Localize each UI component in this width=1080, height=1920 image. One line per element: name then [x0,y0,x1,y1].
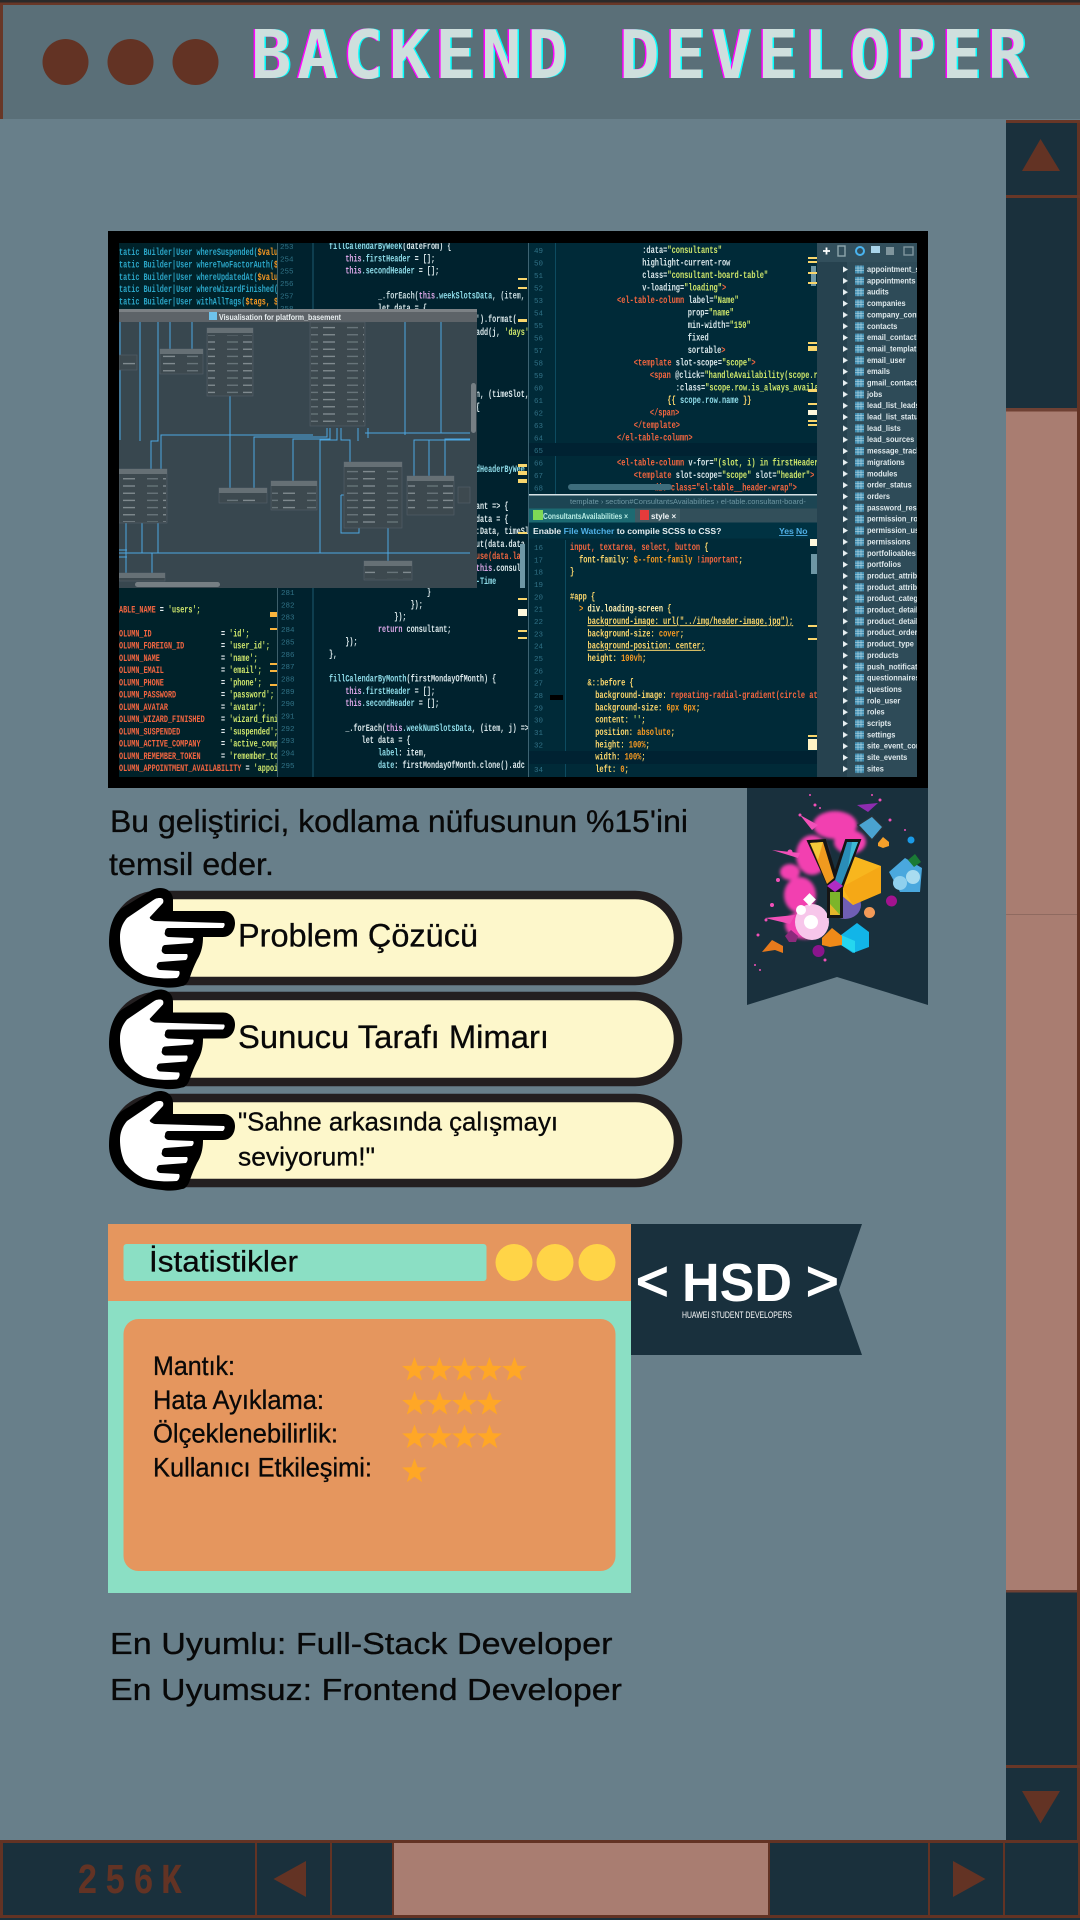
code panel: left PHP: = [221,665,225,677]
database table sidebar: product_detail [867,605,918,615]
arrow: scroll left [274,1861,306,1897]
relation lines [119,322,470,573]
database table sidebar: appointment_s [867,264,920,274]
database table sidebar: permissions [867,537,911,547]
code panel: middle JS: ut(data.data [476,539,525,551]
code panel: left PHP: = [245,763,250,775]
database table sidebar: emails [867,367,891,376]
database table sidebar: permission_us [867,525,920,535]
database table sidebar: role_user [867,696,900,705]
code panel: right Vue and SCSS: 25 [534,656,544,664]
code panel: right Vue and SCSS: <el-table-column v-for="(slot, i) in firstHeader" [617,457,823,469]
code panel: left PHP: 'name'; [229,653,258,665]
code panel: left PHP: ABLE_NAME = 'users'; [119,604,201,616]
code panel: middle JS: 285 [281,639,295,647]
horizontal status bar [0,1840,1080,1920]
code panel: right Vue and SCSS: class="consultant-board-table" [642,270,768,281]
code panel: middle JS: }, [329,649,337,660]
code panel: left PHP: = [221,628,225,640]
code panel: right Vue and SCSS: <div class="el-table__header-wrap"> [650,482,797,494]
database table sidebar: jobs [866,389,883,399]
code panel: middle JS: 295 [281,763,295,771]
database table sidebar: product_type [867,639,914,649]
code panel: left PHP: OLUMN_FOREIGN_ID [119,641,184,652]
database table sidebar: site_events [867,752,908,762]
list item: Sunucu Tarafı Mimarı [109,990,678,1089]
database table sidebar: email_contact [867,333,917,342]
code panel: middle JS: :Data, timeSl [476,526,529,538]
code panel: right Vue and SCSS: fixed [688,332,709,344]
code panel: right Vue and SCSS: height: 100%; [595,739,650,751]
code panel: right Vue and SCSS: 61 [534,398,544,406]
code panel: right Vue and SCSS: </template> [634,420,680,431]
code panel: middle JS: this.secondHeader = []; [345,266,439,277]
code panel: right Vue and SCSS: } [570,567,574,578]
code panel: right Vue and SCSS: 23 [534,631,544,639]
code panel: right Vue and SCSS: highlight-current-row [642,257,731,269]
list item: quote [109,1091,678,1191]
code panel: right Vue and SCSS: 54 [534,310,544,318]
heading: İstatistikler: İstatistikler [149,1246,298,1279]
compatibility text: En Uyumsuz: Frontend Developer [110,1672,622,1707]
code panel: middle JS: 287 [281,664,295,672]
code panel: left PHP: tatic Builder|User withAllTags($tags, $ [119,296,278,308]
editor split: breadcrumb and tabs: Enable File Watcher to compile SCSS to CSS? [533,526,721,536]
code panel: right Vue and SCSS: <template slot-scope="scope"> [634,357,756,369]
code panel: right Vue and SCSS: 49 [534,248,543,256]
code panel: right Vue and SCSS: :class="scope.row.is_always_available" [676,382,835,394]
window title bar [0,0,1080,119]
code panel: middle JS: -Time [476,576,496,588]
database table sidebar: portfolioables [867,548,916,558]
code panel: right Vue and SCSS: 52 [534,286,543,294]
code panel: left PHP: OLUMN_NAME [119,653,160,665]
code panel: left PHP: = [221,677,225,689]
database table sidebar: settings [867,730,896,740]
intro text: Bu geliştirici, kodlama nüfusunun %15'ini [110,803,688,839]
code panel: middle JS: }); [394,612,407,623]
code panel: middle JS: 258 [280,306,294,314]
code panel: left PHP: 'user_id'; [229,641,270,652]
code panel: middle JS: fillCalendarByWeek(dateFrom) { [329,241,451,253]
code panel: middle JS: 288 [281,676,295,684]
database table sidebar: permission_rol [867,514,920,524]
code panel: right Vue and SCSS: </el-table-column> [617,432,693,444]
database table sidebar: companies [867,298,906,308]
code panel: right Vue and SCSS: background-image: url("../img/header-image.jpg"); [587,616,793,627]
database table sidebar: roles [867,707,885,717]
code panel: middle JS: fillCalendarByMonth(firstMondayOfMonth) { [329,673,496,685]
list item: Sunucu Tarafı Mimarı: Sunucu Tarafı Mimarı [238,1019,549,1055]
paint splash [780,811,866,939]
code panel: right Vue and SCSS: 17 [534,557,543,565]
database table sidebar: appointments [867,276,916,285]
code panel: middle JS: this.secondHeader = []; [345,698,439,710]
code panel: right Vue and SCSS: </span> [650,407,679,419]
code panel: right Vue and SCSS: content: ''; [595,715,646,726]
database table sidebar: sites [867,764,884,774]
code panel: right Vue and SCSS: 32 [534,742,543,750]
code panel: left PHP: = [221,653,225,665]
code panel: left PHP: = [221,751,225,762]
database visualisation window [119,309,477,588]
code panel: right Vue and SCSS: height: 100vh; [587,653,646,664]
vertical scrollbar [1006,120,1080,1840]
code panel: right Vue and SCSS: :data="consultants" [642,245,722,256]
code panel: right Vue and SCSS: 27 [534,681,543,689]
code panel: right Vue and SCSS: background-size: 6px 6px; [595,702,700,714]
code panel: right Vue and SCSS: position: absolute; [595,727,675,738]
code panel: middle JS: 286 [281,652,295,660]
code panel: right Vue and SCSS: sortable> [688,345,726,356]
database table sidebar: order_status [867,480,912,490]
code panel: right Vue and SCSS: 64 [534,436,544,444]
code panel: right Vue and SCSS: width: 100%; [595,752,646,763]
code panel: right Vue and SCSS: input, textarea, select, button { [570,542,709,553]
code panel: right Vue and SCSS [529,243,835,777]
code panel: left PHP [119,248,277,773]
code panel: right Vue and SCSS: 55 [534,323,544,331]
database table sidebar: product_attrib [867,571,917,581]
editor split: breadcrumb and tabs [529,494,817,538]
editor split: breadcrumb and tabs: style × [651,512,676,521]
code panel: left PHP: tatic Builder|User whereTwoFactorAuth($valu [119,259,294,271]
scrollbar thumb [1006,408,1077,1592]
right panel gutter marks [808,257,817,750]
database table sidebar: site_event_com [867,741,922,751]
code panel: middle JS: let data = { [378,303,427,314]
code panel: middle JS: this.firstHeader = []; [345,686,435,697]
code panel: right Vue and SCSS: 24 [534,644,544,652]
code panel: right Vue and SCSS: 62 [534,410,543,418]
database table sidebar: company_cont [867,310,919,320]
stats card [124,1319,616,1571]
code panel: middle JS: 294 [281,751,295,759]
code panel: left PHP: 'id'; [229,628,250,640]
code panel: left PHP: OLUMN_EMAIL [119,665,164,677]
code panel: middle JS: 281 [281,590,295,598]
code panel: right Vue and SCSS: 22 [534,619,543,627]
stat: Ölçeklenebilirlik: Ölçeklenebilirlik: [153,1418,338,1448]
code panel: left PHP: OLUMN_WIZARD_FINISHED [119,714,205,726]
code panel: middle JS: dHeaderByWee [476,464,525,476]
list item: Problem Çözücü: Problem Çözücü [238,918,478,954]
code panel: left PHP: OLUMN_AVATAR [119,702,168,713]
window control dots [42,39,218,85]
code panel: middle JS: }); [411,599,423,611]
intro text [109,803,688,882]
code panel: left PHP: OLUMN_SUSPENDED [119,726,180,738]
code panel: right Vue and SCSS: <el-table-column label="Name" [617,295,739,306]
database table sidebar: orders [867,491,891,501]
bookmark ribbon with colourful Y logo [747,788,928,1005]
code panel: left PHP: 'remember_tok [229,751,282,762]
code panel: middle JS: 257 [280,293,294,301]
code panel: left PHP: 'active_compa [229,738,282,750]
code panel: right Vue and SCSS: <template slot-scope="scope" slot="header"> [634,470,814,481]
code panel: middle JS: 282 [281,602,295,610]
window dots [496,1244,616,1281]
code panel: middle JS: 289 [281,689,295,697]
database table sidebar: questionnaires [867,673,920,683]
database table sidebar: audits [867,287,889,297]
code panel: right Vue and SCSS: 58 [534,360,543,368]
code panel: right Vue and SCSS: 29 [534,705,543,713]
code panel: middle JS: } [427,587,431,599]
code panel: left PHP: 'appoi [254,763,278,775]
code panel: right Vue and SCSS: 57 [534,348,543,356]
database table sidebar: product_detail [867,616,918,626]
code panel: middle JS: 291 [281,714,295,722]
compatibility text: En Uyumlu: Full-Stack Developer [110,1626,612,1661]
database table sidebar: lead_list_leads [867,401,920,410]
database table sidebar: modules [867,469,898,478]
code panel: left PHP: OLUMN_APPOINTMENT_AVAILABILITY [119,763,241,775]
database table sidebar: gmail_contacts [867,378,921,388]
code panel: left PHP: OLUMN_PASSWORD [119,690,176,701]
code panel: right Vue and SCSS: 19 [534,582,543,590]
code panel: middle JS: ant => { [476,501,509,513]
code panel: middle JS: date: firstMondayOfMonth.clone().adc [378,760,525,772]
ribbon: HSD logo [631,1224,862,1355]
code panel: middle JS: return consultant; [378,624,451,636]
panel: statistics window [108,1224,631,1593]
code panel: left PHP: OLUMN_REMEMBER_TOKEN [119,751,201,762]
heading: İstatistikler [124,1244,486,1281]
code panel: middle JS: 253 [280,244,294,252]
stat: Kullanıcı Etkileşimi: Kullanıcı Etkileşimi: [153,1453,372,1483]
database table sidebar: password_rese [867,503,921,513]
stat: Hata Ayıklama [153,1385,502,1415]
code panel: right Vue and SCSS: prop="name" [688,307,734,319]
title: BACKEND DEVELOPER [251,16,1034,94]
code panel: middle JS: label: item, [378,747,427,759]
database table sidebar: email_templat [867,344,917,354]
database table sidebar: lead_list_status [867,412,923,422]
database table sidebar: products [867,650,899,660]
arrow: scroll up [1022,139,1060,171]
ribbon: HSD logo: > [806,1249,839,1312]
code panel: right Vue and SCSS: 34 [534,767,544,775]
code panel: left PHP: = [221,702,225,713]
code panel: right Vue and SCSS: 33 [534,755,544,763]
code panel: right Vue and SCSS: 50 [534,260,544,268]
code panel: left PHP: OLUMN_ID [119,628,152,640]
code panel: left PHP: 'phone'; [229,677,262,689]
code panel: right Vue and SCSS: background-size: cover; [587,628,684,640]
arrow: scroll right [953,1861,986,1897]
stat: Ölçeklenebilirlik [153,1418,502,1448]
editor split: breadcrumb and tabs: Yes [779,526,794,536]
database visualisation window: Visualisation for platform_basement [219,312,341,322]
database table sidebar: scripts [867,718,892,728]
code panel: middle JS: _.forEach(this.weekNumSlotsData, (item, j) => [345,723,529,734]
code panel: right Vue and SCSS: font-family: $--font-family !important; [579,554,743,566]
code panel: right Vue and SCSS: 66 [534,460,544,468]
database table sidebar: questions [867,684,902,694]
database table sidebar: lead_sources [867,435,915,444]
code panel: right Vue and SCSS: left: 0; [595,764,629,775]
code panel: middle JS: ').format( [476,314,517,326]
database table sidebar: product_categ [867,594,918,603]
code screenshot photo [108,231,928,788]
code panel: left PHP: = [221,726,225,738]
code panel: right Vue and SCSS: background-image: repeating-radial-gradient(circle at [595,690,818,701]
database table sidebar [817,243,923,777]
code panel: middle JS: { [476,402,480,414]
code panel: left PHP: tatic Builder|User whereWizardFinished($v [119,284,286,296]
database table sidebar: product_order [867,628,918,637]
editor split: breadcrumb and tabs: No [796,526,807,536]
code panel: middle JS: this.consul [476,563,521,575]
code panel: right Vue and SCSS: min-width="150" [688,320,751,331]
code panel: right Vue and SCSS: 21 [534,607,544,615]
arrow: scroll down [1022,1791,1060,1824]
list item: Problem Çözücü [109,888,678,988]
database table sidebar: portfolios [867,560,902,569]
code panel: left PHP: = [221,714,225,726]
memory label: 256K: 256K [77,1858,182,1906]
code panel: middle JS: 283 [281,615,295,623]
code panel: middle JS: let data = { [362,735,411,747]
code panel: middle JS: this.firstHeader = []; [345,253,435,265]
code panel: right Vue and SCSS: <span @click="handleAvailability(scope.row)" [650,370,835,381]
code panel: left PHP: = [221,738,225,750]
database table sidebar: migrations [867,457,905,467]
code panel: right Vue and SCSS: 30 [534,718,544,726]
ribbon: HSD logo: HSD [682,1253,792,1313]
code panel: left PHP: 'password'; [229,690,274,701]
code panel: right Vue and SCSS: 59 [534,373,543,381]
Y letter [808,840,860,917]
database table sidebar: email_user [867,355,906,365]
code panel: right Vue and SCSS: 63 [534,423,544,431]
code panel: left PHP: 'wizard_finis [229,714,282,726]
code panel: left PHP: = [221,641,225,652]
code panel: middle JS: 284 [281,627,295,635]
code panel: right Vue and SCSS: {{ scope.row.name }} [667,395,751,406]
database table sidebar: contacts [867,321,898,331]
code panel: right Vue and SCSS: 67 [534,473,543,481]
code panel: right Vue and SCSS: background-position: center; [587,641,705,652]
code panel: middle JS: 254 [280,256,294,264]
code panel: right Vue and SCSS: #app { [570,591,595,603]
ribbon: HSD logo: HUAWEI STUDENT DEVELOPERS [682,1310,792,1321]
database table sidebar: message_track [867,446,921,456]
stat: Mantık [153,1351,527,1381]
code panel: middle JS: 255 [280,269,294,277]
code panel: middle JS: _.forEach(this.weekSlotsData, (item, j) => { [377,290,557,302]
code panel: left PHP: tatic Builder|User whereUpdatedAt($valu [119,272,278,283]
mid panel gutter marks [518,278,527,639]
code panel: left PHP: OLUMN_PHONE [119,677,164,689]
code panel: right Vue and SCSS: v-loading="loading"> [642,282,726,294]
code panel: middle JS: n, (timeSlot, [476,389,529,401]
code panel: right Vue and SCSS: 26 [534,668,544,676]
schema tables [119,322,470,581]
code panel: right Vue and SCSS: 28 [534,693,543,701]
code panel: right Vue and SCSS: 60 [534,386,544,394]
code panel: middle JS: use(data.lab [476,551,525,563]
editor split: breadcrumb and tabs: template › section#ConsultantsAvailabilities › el-table.consultant-board- [570,497,806,506]
database table sidebar: push_notificati [867,662,920,671]
intro text: temsil eder. [109,846,274,882]
database table sidebar: product_attrib [867,582,917,592]
list item: quote: seviyorum!" [238,1142,375,1172]
code panel: right Vue and SCSS: 65 [534,448,544,456]
editor split: breadcrumb and tabs: ConsultantsAvailabilities × [543,512,628,521]
code panel: right Vue and SCSS: 20 [534,594,544,602]
database table sidebar: lead_lists [867,423,901,433]
code panel: left PHP: 'email'; [229,665,262,677]
code panel: left PHP: 'avatar'; [229,702,266,713]
code panel: middle JS: add(j, 'days' [476,327,529,339]
code panel: left PHP: 'suspended'; [229,726,278,738]
code panel: right Vue and SCSS: 18 [534,570,543,578]
ribbon: HSD logo: < [636,1249,669,1312]
code panel: middle JS: 293 [281,738,295,746]
code panel: left PHP: OLUMN_ACTIVE_COMPANY [119,738,201,750]
code panel: middle JS: 256 [280,281,294,289]
code panel: middle JS: 290 [281,701,295,709]
code panel: left PHP: tatic Builder|User whereSuspended($valu [119,247,278,259]
code panel: middle JS [280,243,528,777]
code panel: right Vue and SCSS: 68 [534,486,543,494]
code panel: middle JS: 292 [281,726,295,734]
code panel: right Vue and SCSS: > div.loading-screen { [579,604,671,615]
code panel: middle JS: data = { [476,514,509,526]
code panel: right Vue and SCSS: &::before { [587,678,634,689]
code panel: right Vue and SCSS: 53 [534,298,544,306]
code panel: right Vue and SCSS: 51 [534,273,544,281]
compatibility text [110,1626,622,1707]
list item: quote: "Sahne arkasında çalışmayı [238,1107,558,1137]
code panel: right Vue and SCSS: 16 [534,545,544,553]
code panel: right Vue and SCSS: 31 [534,730,544,738]
code panel: middle JS: }); [345,636,358,648]
stat: Mantık: Mantık: [153,1351,235,1381]
stat: Hata Ayıklama: Hata Ayıklama: [153,1385,324,1415]
code panel: left PHP: = [221,690,225,701]
code panel: right Vue and SCSS: 56 [534,336,544,344]
